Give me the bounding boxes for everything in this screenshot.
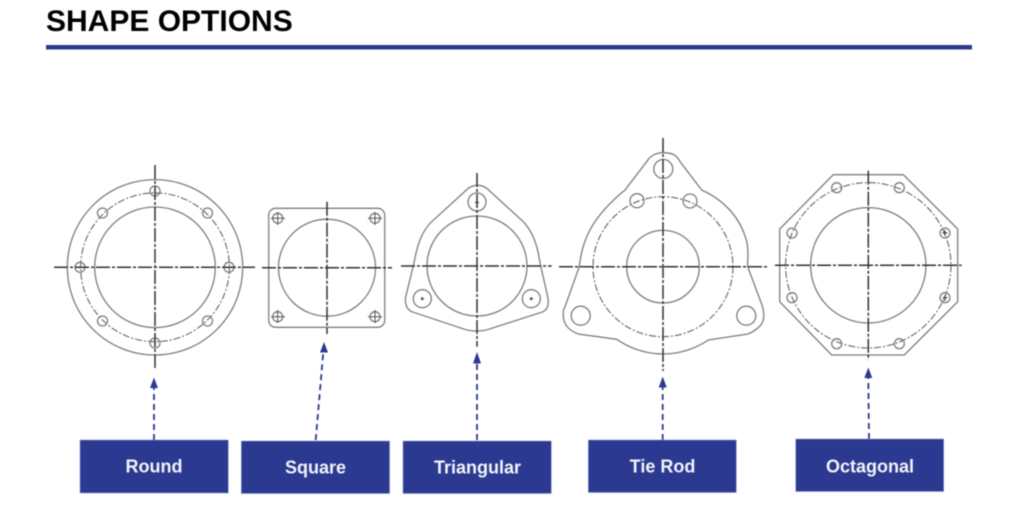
- arrow: octagonal: [864, 368, 872, 439]
- label: Round: Round: [126, 456, 182, 476]
- label: Tie Rod: [588, 440, 736, 492]
- label: Triangular: [403, 441, 551, 494]
- label: Triangular: Triangular: [434, 458, 521, 478]
- label: Octagonal: Octagonal: [826, 456, 914, 476]
- arrow: triangular: [473, 352, 481, 440]
- arrow: tie rod: [659, 376, 667, 440]
- arrow: square: [316, 342, 328, 440]
- label: Round: [80, 440, 228, 493]
- title rule: [46, 45, 972, 50]
- drawing: triangular flange: [401, 173, 552, 347]
- drawing: square flange: [262, 202, 392, 334]
- drawing: round flange: [54, 165, 255, 369]
- label: Square: [241, 441, 390, 494]
- arrow: round: [150, 378, 158, 440]
- label: Square: Square: [285, 458, 346, 478]
- drawing: octagonal flange: [775, 171, 962, 360]
- label: Tie Rod: Tie Rod: [630, 456, 695, 476]
- title: SHAPE OPTIONS: [46, 5, 293, 38]
- drawing: tie rod flange: [559, 138, 767, 371]
- label: Octagonal: [796, 439, 944, 492]
